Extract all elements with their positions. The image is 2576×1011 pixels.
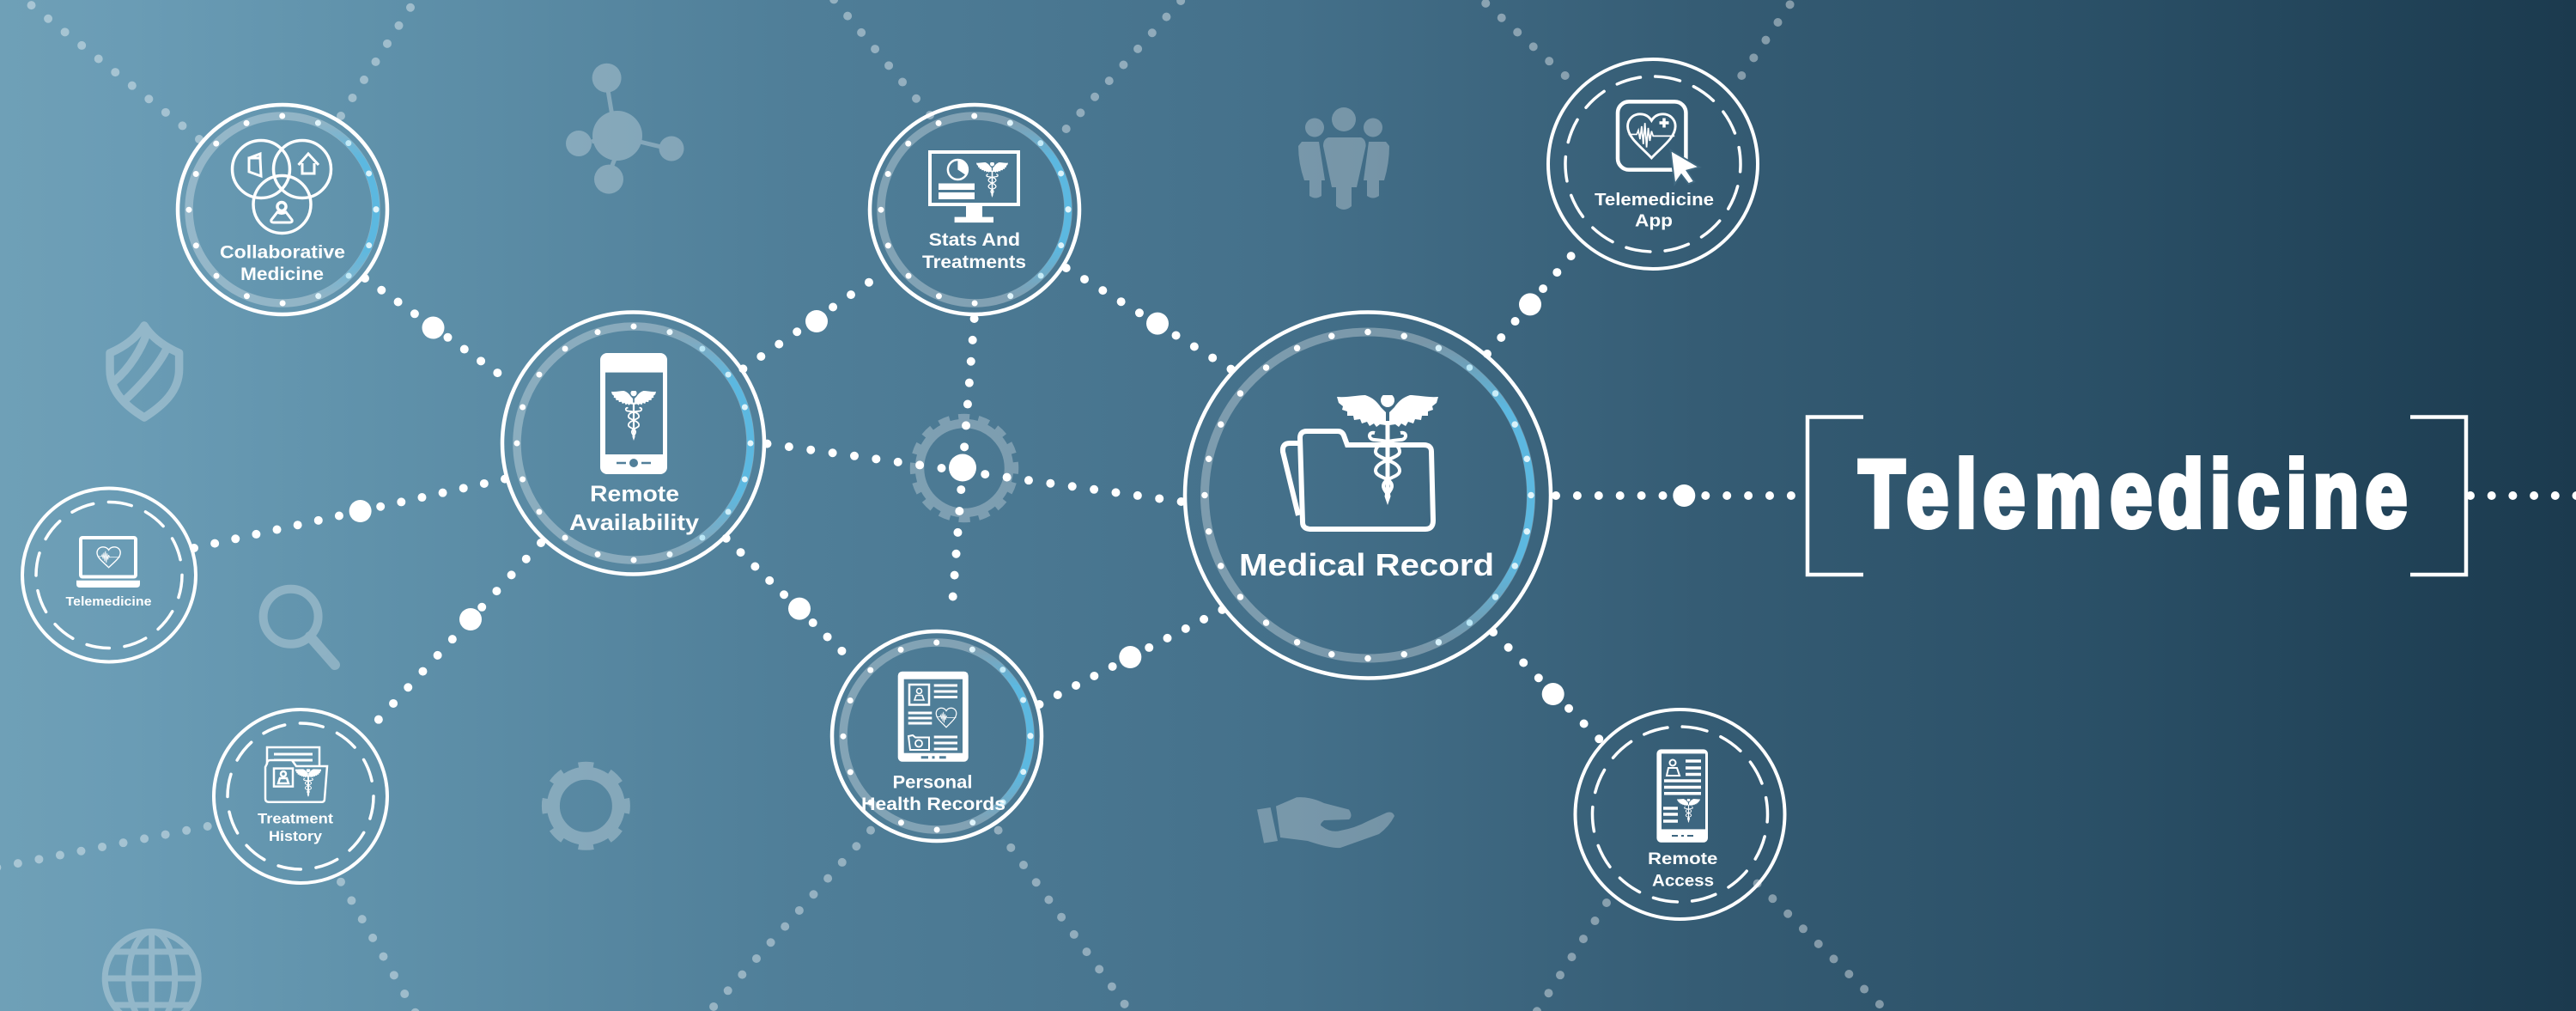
panel: Remote Availability: [502, 313, 764, 574]
label: Medical Record: [1239, 547, 1494, 582]
icon: app with heart and cursor: [1618, 101, 1698, 183]
icon: venn diagram: [232, 141, 331, 234]
icon: molecule: [566, 64, 683, 194]
panel: Remote Access: [1575, 710, 1784, 919]
label: Telemedicine: [65, 594, 151, 609]
label: History: [269, 829, 323, 844]
icon: open hand: [1257, 797, 1394, 848]
panel: Medical Record: [1185, 313, 1551, 679]
title: Telemedicine: [1859, 442, 2407, 547]
connector node dots: [349, 293, 1695, 705]
icon: cog: [539, 759, 633, 853]
icon: globe: [105, 931, 198, 1011]
icon: magnifier: [264, 589, 335, 665]
panel: Telemedicine laptop: [22, 488, 196, 661]
panel: Telemedicine App: [1548, 59, 1758, 269]
label: Medicine: [240, 265, 324, 284]
icon: shield: [110, 326, 179, 417]
panel: Collaborative Medicine: [178, 105, 387, 314]
label: Access: [1652, 872, 1714, 891]
label: Treatment: [258, 811, 334, 826]
panel: Stats And Treatments: [870, 105, 1079, 314]
label: Health Records: [861, 795, 1005, 814]
icon: laptop with heart: [76, 538, 140, 588]
icon: central gear: [908, 411, 1021, 525]
icon: monitor with chart: [930, 152, 1018, 222]
panel: Personal Health Records: [832, 631, 1042, 841]
label: Personal: [893, 773, 972, 793]
label: Treatments: [922, 253, 1026, 272]
title block: Telemedicine: [1807, 417, 2466, 575]
label: Availability: [569, 509, 700, 535]
icon: folder with caduceus: [1283, 393, 1438, 529]
icon: people group: [1298, 107, 1389, 210]
label: Remote: [590, 481, 679, 507]
label: App: [1635, 211, 1673, 230]
icon: phone record: [1656, 749, 1708, 843]
panel: Treatment History: [214, 710, 387, 883]
white connector lines: [194, 256, 2576, 740]
label: Telemedicine: [1595, 191, 1714, 210]
icon: smartphone with caduceus: [600, 353, 667, 474]
label: Collaborative: [220, 242, 345, 262]
icon: patient folder: [265, 747, 327, 802]
label: Remote: [1648, 850, 1718, 868]
faded background network lines: [0, 0, 1893, 1011]
icon: tablet record: [898, 672, 969, 762]
label: Stats And: [929, 230, 1020, 250]
